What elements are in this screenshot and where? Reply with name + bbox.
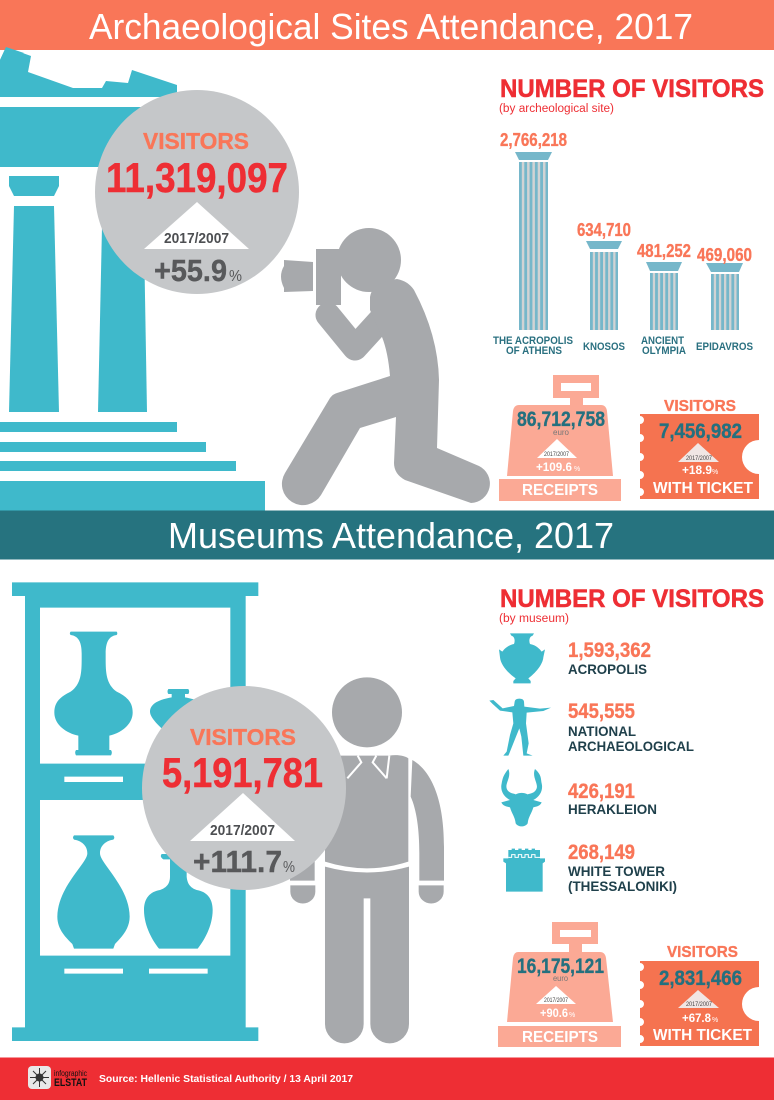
museum row: White Tower <box>568 841 677 894</box>
ticket: visitors with ticket, museums: +67.8 <box>682 1011 711 1025</box>
column: Knosos <box>577 220 631 353</box>
museum row: Herakleion <box>568 780 657 817</box>
museum row: Acropolis <box>568 639 651 677</box>
heading: number of visitors by museum: NUMBER OF VISITORS <box>500 585 764 613</box>
column: Ancient Olympia: ANCIENT <box>641 335 684 347</box>
ticket: visitors with ticket, museums: VISITORS <box>667 944 738 961</box>
column: Epidavros: 469,060 <box>697 245 752 265</box>
heading: number of visitors by site: (by archeological site) <box>499 103 614 115</box>
logo text <box>54 1069 87 1089</box>
column: Epidavros: EPIDAVROS <box>696 341 753 353</box>
museum row: Acropolis: 1,593,362 <box>568 639 651 662</box>
receipts scale: archaeological sites: % <box>574 466 580 473</box>
title banner: archaeological sites <box>0 0 774 60</box>
temple illustration <box>0 47 265 511</box>
museum row: White Tower: (THESSALONIKI) <box>568 878 677 894</box>
receipts scale: archaeological sites <box>499 375 621 501</box>
ticket: visitors with ticket, museums: 2,831,466 <box>659 967 742 990</box>
receipts scale: archaeological sites: euro <box>553 428 570 437</box>
visitors circle: archaeological sites: 2017/2007 <box>164 230 229 247</box>
receipts scale: museums <box>498 922 621 1047</box>
museum row: National Archaeological: NATIONAL <box>568 723 636 739</box>
heading: number of visitors by museum <box>499 585 764 625</box>
receipts scale: archaeological sites: 86,712,758 <box>517 408 605 431</box>
icon: white tower <box>503 849 545 892</box>
column: Knosos: 634,710 <box>577 220 631 240</box>
ticket: visitors with ticket, archaeological sites <box>640 398 759 499</box>
visitors circle: museums: VISITORS <box>190 724 296 750</box>
logo text: infographic <box>54 1069 87 1078</box>
museum row: National Archaeological: 545,555 <box>568 700 635 723</box>
museum row: Herakleion: HERAKLEION <box>568 801 657 817</box>
vase: top left <box>54 632 133 755</box>
visitors circle: museums <box>142 686 346 890</box>
receipts scale: museums: 2017/2007 <box>544 998 569 1004</box>
ticket: visitors with ticket, archaeological sites: WITH TICKET <box>653 480 753 497</box>
icon: amphora <box>499 633 545 683</box>
museum row: National Archaeological: ARCHAEOLOGICAL <box>568 738 694 754</box>
visitor figure <box>290 677 444 1043</box>
title banner: museums <box>0 510 774 560</box>
visitors circle: museums: % <box>283 859 295 876</box>
receipts scale: archaeological sites: 2017/2007 <box>544 452 570 458</box>
visitors circle: archaeological sites <box>95 90 299 294</box>
heading: number of visitors by site <box>499 75 764 115</box>
heading: number of visitors by site: NUMBER OF VISITORS <box>500 75 764 103</box>
ticket: visitors with ticket, museums <box>640 944 759 1046</box>
receipts scale: museums: % <box>569 1012 575 1019</box>
vase: top right <box>150 689 207 733</box>
photographer figure <box>281 228 490 505</box>
visitors circle: archaeological sites: % <box>229 268 242 285</box>
heading: number of visitors by museum: (by museum) <box>499 613 569 625</box>
column: the Acropolis of Athens: THE ACROPOLIS <box>493 335 573 347</box>
column chart: visitors by archaeological site <box>493 130 753 357</box>
ticket: visitors with ticket, archaeological sites: 7,456,982 <box>659 420 742 443</box>
visitors circle: archaeological sites: VISITORS <box>143 128 249 154</box>
ticket: visitors with ticket, museums: 2017/2007 <box>686 1002 713 1008</box>
ticket: visitors with ticket, archaeological sites: 2017/2007 <box>686 456 713 462</box>
museum row: White Tower: WHITE TOWER <box>568 863 665 879</box>
receipts scale: museums: +90.6 <box>540 1006 568 1020</box>
visitors circle: archaeological sites: 11,319,097 <box>106 154 288 201</box>
visitors circle: museums: +111.7 <box>193 844 282 879</box>
column: Ancient Olympia: OLYMPIA <box>642 345 686 357</box>
footer <box>0 1058 774 1100</box>
museum row: Acropolis: ACROPOLIS <box>568 661 647 677</box>
receipts scale: museums: RECEIPTS <box>522 1029 598 1046</box>
title banner: museums: Museums Attendance, 2017 <box>168 515 614 556</box>
column: the Acropolis of Athens: 2,766,218 <box>500 130 567 150</box>
icon: bull head <box>501 769 542 826</box>
receipts scale: museums: euro <box>553 974 569 983</box>
column: Ancient Olympia: 481,252 <box>637 241 691 261</box>
icon: ELSTAT logo <box>28 1066 51 1089</box>
source line: Source: Hellenic Statistical Authority / 13 April 2017 <box>99 1074 353 1085</box>
receipts scale: archaeological sites: +109.6 <box>536 460 572 474</box>
museum row: National Archaeological <box>568 700 694 754</box>
visitors circle: museums: 2017/2007 <box>210 822 275 839</box>
visitors circle: museums: 5,191,781 <box>162 749 323 796</box>
receipts scale: museums: 16,175,121 <box>517 955 604 978</box>
visitors circle: archaeological sites: +55.9 <box>154 253 227 288</box>
icon: statue <box>489 699 551 756</box>
column: Epidavros <box>696 245 753 353</box>
column: Knosos: KNOSOS <box>583 341 625 353</box>
column: the Acropolis of Athens: OF ATHENS <box>506 345 562 357</box>
ticket: visitors with ticket, archaeological sites: +18.9 <box>682 463 712 477</box>
column: Ancient Olympia <box>637 241 691 357</box>
list: visitors by museum <box>489 633 694 894</box>
vase: bottom left <box>57 835 130 949</box>
display case with vases <box>12 582 258 1041</box>
ticket: visitors with ticket, museums: % <box>712 1017 718 1024</box>
column: the Acropolis of Athens <box>493 130 573 357</box>
ticket: visitors with ticket, museums: WITH TICKET <box>653 1027 752 1044</box>
title banner: archaeological sites: Archaeological Sites Attendance, 2017 <box>89 6 693 47</box>
museum row: Herakleion: 426,191 <box>568 780 635 803</box>
ticket: visitors with ticket, archaeological sites: VISITORS <box>664 398 736 415</box>
logo text: ELSTAT <box>54 1077 87 1089</box>
vase: bottom right <box>144 854 213 949</box>
museum row: White Tower: 268,149 <box>568 841 635 864</box>
ticket: visitors with ticket, archaeological sites: % <box>712 469 718 476</box>
receipts scale: archaeological sites: RECEIPTS <box>522 482 598 499</box>
